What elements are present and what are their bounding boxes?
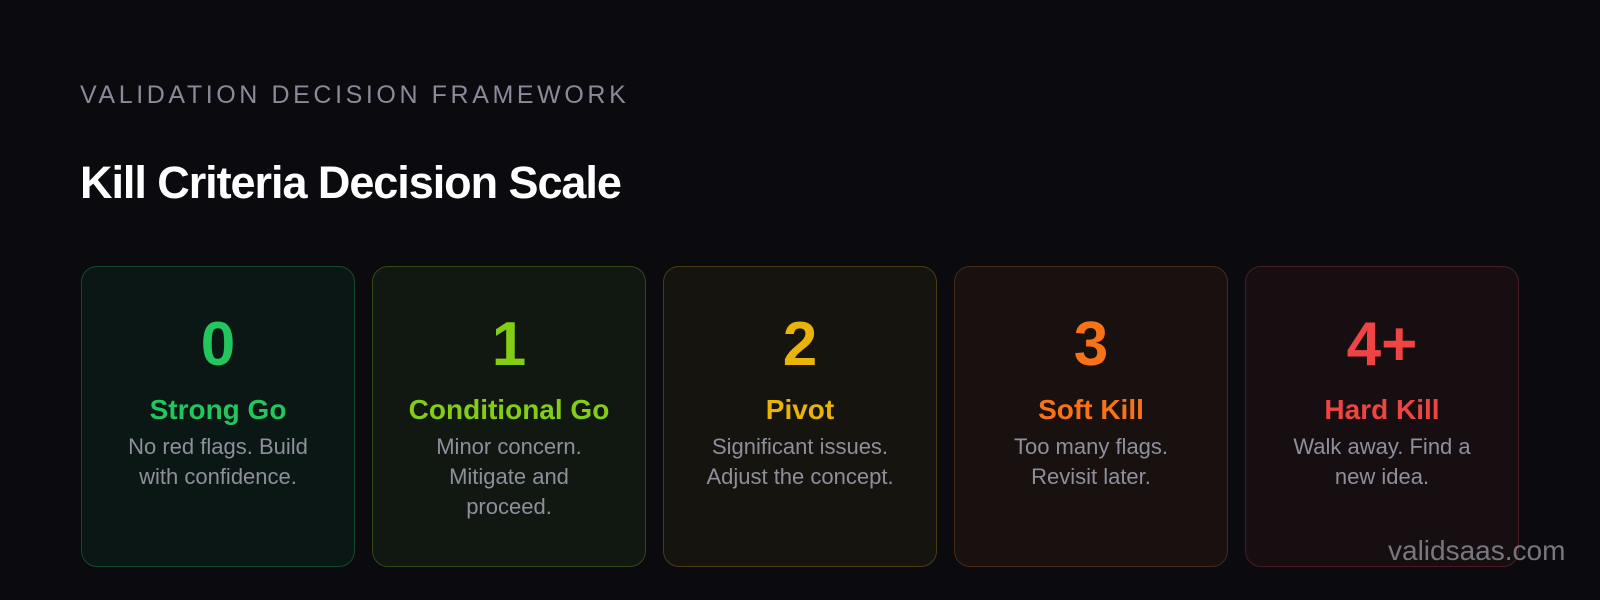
subtitle: VALIDATION DECISION FRAMEWORK bbox=[80, 81, 629, 109]
number 3: 3 bbox=[1074, 310, 1108, 379]
title: Kill Criteria Decision Scale bbox=[80, 157, 621, 208]
card: conditional go bbox=[372, 266, 646, 567]
desc: Too many flags. Revisit later. bbox=[1014, 434, 1168, 489]
label strong go: Strong Go bbox=[150, 394, 286, 425]
number 0: 0 bbox=[201, 310, 235, 379]
card: soft kill bbox=[954, 266, 1228, 567]
card: hard kill bbox=[1245, 266, 1519, 567]
label pivot: Pivot bbox=[766, 394, 834, 425]
card: strong go bbox=[81, 266, 355, 567]
card: pivot bbox=[663, 266, 937, 567]
number 4+: 4+ bbox=[1347, 310, 1417, 379]
desc: Minor concern. Mitigate and proceed. bbox=[436, 434, 582, 519]
label conditional go: Conditional Go bbox=[409, 394, 609, 425]
watermark: validsaas.com bbox=[1388, 535, 1565, 566]
number 2: 2 bbox=[783, 310, 817, 379]
desc: Significant issues. Adjust the concept. bbox=[706, 434, 894, 489]
label hard kill: Hard Kill bbox=[1324, 394, 1440, 425]
number 1: 1 bbox=[492, 310, 526, 379]
label soft kill: Soft Kill bbox=[1038, 394, 1144, 425]
desc: No red flags. Build with confidence. bbox=[128, 434, 308, 489]
desc: Walk away. Find a new idea. bbox=[1293, 434, 1471, 489]
